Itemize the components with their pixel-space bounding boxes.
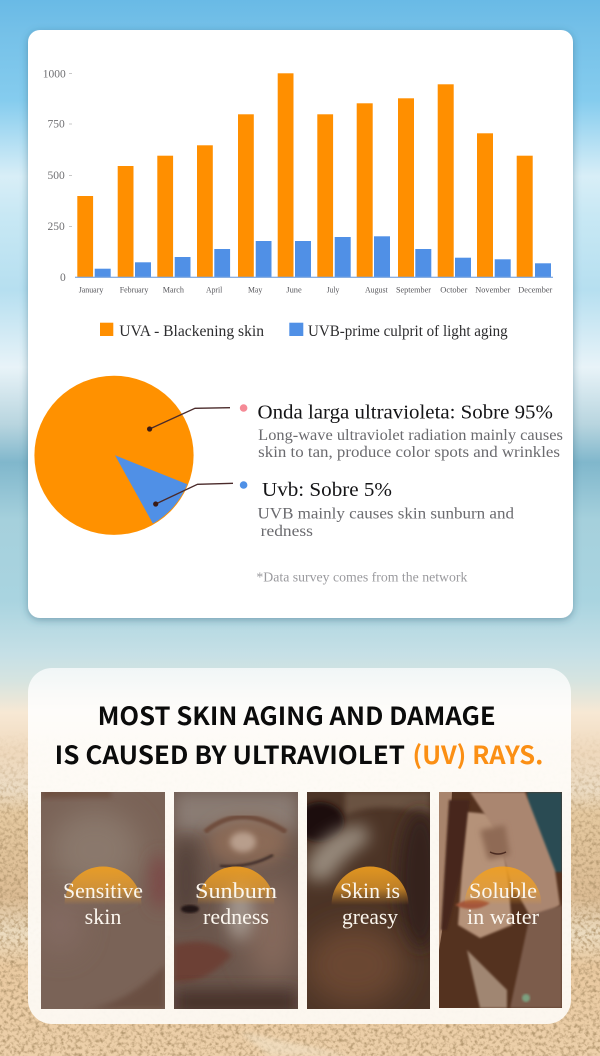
heading: (UV) RAYS. — [412, 736, 543, 772]
photo card: sunburn redness — [173, 792, 298, 1015]
month labels: March — [163, 285, 185, 295]
panel: UV charts card — [28, 30, 573, 618]
UVA bars — [77, 73, 533, 277]
month labels: February — [120, 285, 149, 295]
month labels: July — [327, 285, 340, 295]
heading: MOST SKIN AGING AND DAMAGE — [98, 697, 496, 733]
month labels: August — [365, 285, 388, 295]
text block: long-wave ultraviolet: skin to tan, produce color spots and wrinkles — [258, 444, 560, 461]
callout line: UVB share — [153, 483, 233, 507]
label: Sensitive — [63, 878, 143, 903]
month labels: April — [206, 285, 223, 295]
panel: skin damage card — [28, 668, 571, 1024]
y axis labels: 250 — [48, 221, 65, 233]
month labels: December — [518, 285, 552, 295]
footnote: *Data survey comes from the network — [256, 570, 468, 585]
month labels: October — [440, 285, 467, 295]
text block: long-wave ultraviolet — [240, 401, 563, 461]
chart legend: UVB-prime culprit of light aging — [308, 323, 508, 340]
heading — [55, 697, 543, 772]
label: Sunburn — [195, 878, 277, 903]
month labels: June — [286, 285, 302, 295]
photo card: sensitive skin: skin — [85, 904, 121, 929]
label: Skin is — [340, 878, 400, 903]
text block: long-wave ultraviolet: Onda larga ultravioleta: Sobre 95% — [258, 401, 553, 423]
photo card: greasy skin — [307, 792, 430, 1009]
month labels: September — [396, 285, 431, 295]
chart legend — [100, 323, 508, 340]
month labels: January — [79, 285, 104, 295]
month labels — [79, 285, 552, 295]
y axis labels: 1000 — [43, 68, 66, 80]
heading: IS CAUSED BY ULTRAVIOLET — [55, 736, 405, 772]
UVB bars — [95, 236, 551, 277]
month labels: November — [475, 285, 510, 295]
text block: UVB — [240, 479, 514, 540]
text block: long-wave ultraviolet: Long-wave ultraviolet radiation mainly causes — [258, 427, 563, 444]
chart legend: UVA - Blackening skin — [119, 323, 264, 340]
bar chart: monthly UVA and UVB — [43, 68, 553, 295]
photo card: sensitive skin — [38, 786, 170, 1009]
text block: UVB: UVB mainly causes skin sunburn and — [258, 506, 514, 523]
month labels: May — [248, 285, 263, 295]
callout line: long-wave share — [147, 408, 230, 432]
text block: UVB: Uvb: Sobre 5% — [262, 479, 392, 501]
photo card: soluble in water: in water — [467, 904, 540, 929]
photo card: sunburn redness: redness — [203, 904, 269, 929]
photo card: greasy skin: greasy — [342, 904, 398, 929]
photo card: soluble in water — [439, 792, 562, 1008]
y axis labels — [43, 68, 72, 284]
label: Soluble — [469, 878, 537, 903]
text block: UVB: redness — [261, 523, 313, 540]
y axis labels: 0 — [60, 272, 66, 284]
y axis labels: 750 — [48, 118, 65, 130]
y axis labels: 500 — [48, 170, 65, 182]
pie chart — [34, 376, 194, 535]
